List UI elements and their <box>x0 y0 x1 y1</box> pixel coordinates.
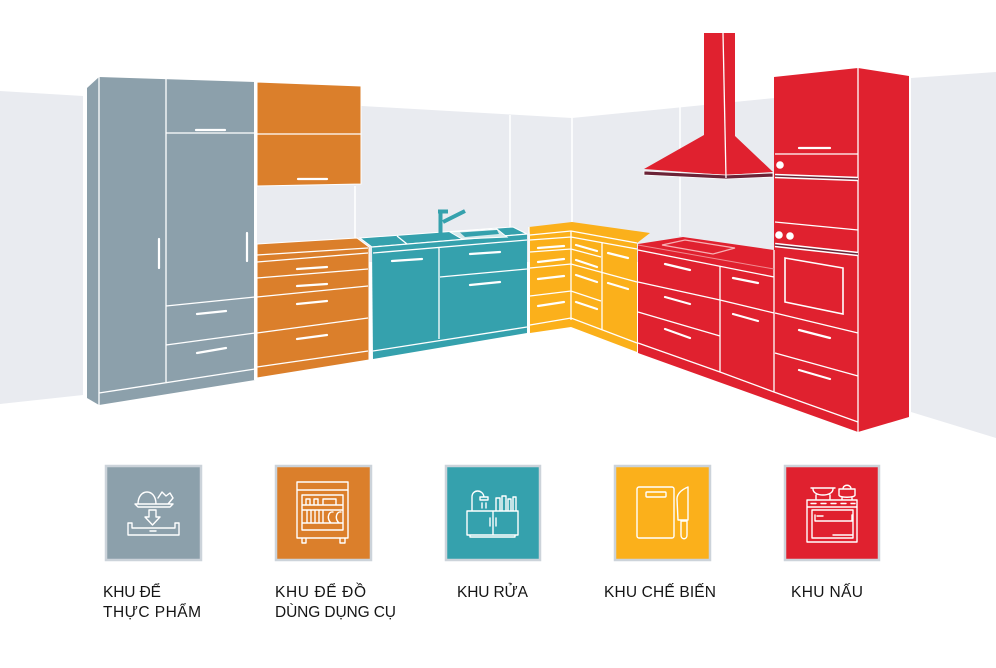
label: utensils: KHU ĐỂ ĐỒ <box>275 583 366 601</box>
label: food storage line 2: THỰC PHẨM <box>103 603 201 621</box>
zone: extractor hood (red) <box>644 33 773 179</box>
legend: food storage <box>103 466 201 621</box>
label: preparation: KHU CHẾ BIẾN <box>604 584 716 601</box>
zone: prep cabinets (yellow) <box>529 222 650 352</box>
walls <box>0 72 996 438</box>
zone: upper utensil cabinet (orange) <box>257 82 361 186</box>
sink basin <box>450 229 507 239</box>
icon: stove with pots <box>785 466 879 560</box>
label: washing: KHU RỬA <box>457 583 529 601</box>
legend: utensils <box>275 466 396 621</box>
label: utensils line 2: DÙNG DỤNG CỤ <box>275 604 396 621</box>
legend: preparation <box>604 466 716 601</box>
icon: sink <box>446 466 540 560</box>
legend: washing <box>446 466 540 601</box>
zone: sink cabinets (teal) <box>360 211 527 359</box>
zone: food storage cabinets (grey) <box>87 77 255 405</box>
label: cooking: KHU NẤU <box>791 584 863 601</box>
zone: cooking cabinets and tall oven unit (red) <box>638 68 909 432</box>
legend: cooking <box>785 466 879 601</box>
label: food storage: KHU ĐỂ <box>103 583 161 601</box>
zone: lower utensil drawers (orange) <box>257 238 369 378</box>
icon: food tray <box>106 466 201 560</box>
icon: cutting board and knife <box>615 466 710 560</box>
icon: dish rack <box>276 466 371 560</box>
